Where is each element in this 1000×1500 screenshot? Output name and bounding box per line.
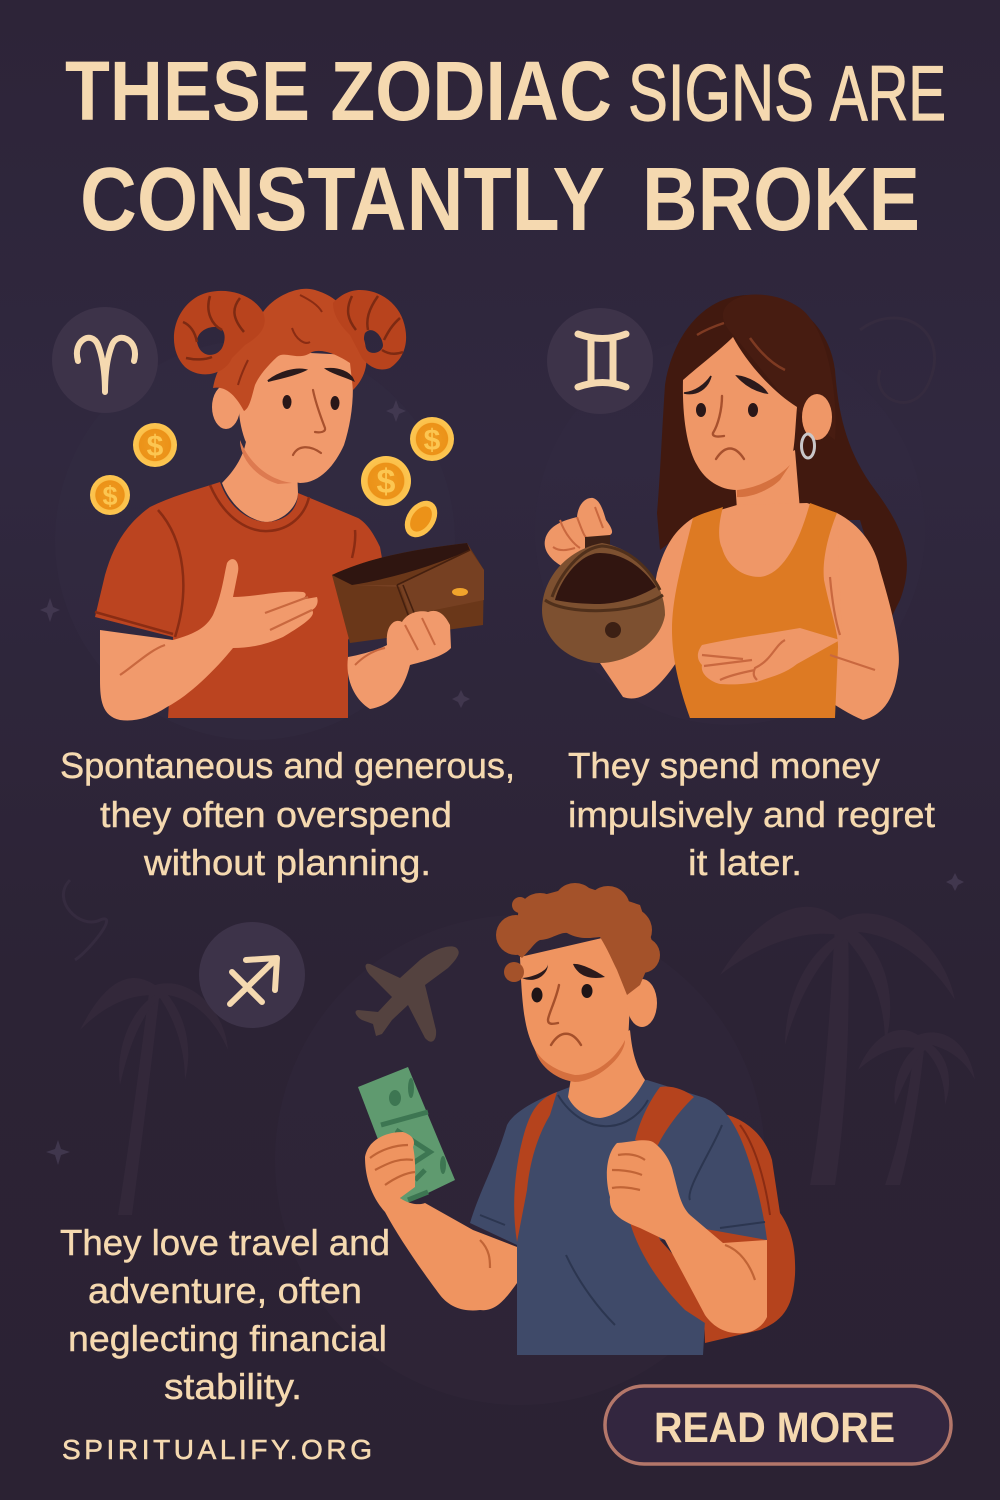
text: gemini description: impulsively and regret: [568, 794, 935, 835]
ear: [627, 979, 657, 1027]
icon: falling coins: $: [424, 424, 441, 457]
face: [239, 352, 353, 483]
long hair: [657, 295, 907, 620]
curly hair: [496, 883, 660, 995]
eyes, brows, nose and mouth: [522, 964, 605, 1045]
text: sagittarius description: adventure, often: [88, 1270, 362, 1311]
text: gemini description: They spend money: [568, 745, 880, 786]
wallet: [332, 543, 484, 643]
icon: aries sign: [52, 307, 158, 413]
coin pouch: [542, 535, 665, 663]
panel: sagittarius: [199, 883, 795, 1355]
text: sagittarius description: [60, 1222, 390, 1407]
text: sagittarius description: neglecting financial: [68, 1318, 387, 1359]
icon: falling coins: $: [147, 430, 164, 463]
icon: falling coins: [90, 417, 454, 543]
text: gemini description: [568, 745, 935, 883]
backpack: [700, 1113, 795, 1343]
t-shirt: [95, 482, 385, 718]
face: [683, 337, 797, 490]
icon: airplane: [355, 946, 459, 1042]
horns: [174, 290, 406, 374]
wallet hand: [347, 611, 451, 709]
text: aries description: Spontaneous and generous,: [60, 745, 515, 786]
eyes, brows, nose and mouth: [684, 376, 767, 459]
character: traveller with backpack: [358, 883, 795, 1355]
neck: [222, 435, 298, 522]
hair: [213, 289, 367, 411]
title line 2: BROKE: [642, 150, 920, 250]
panel: aries: [52, 289, 484, 720]
title: [65, 44, 946, 250]
open hand arm: [100, 559, 318, 720]
icon: falling coins: $: [102, 481, 118, 511]
t-shirt: [470, 1080, 767, 1355]
banknote: [358, 1067, 455, 1205]
hand holding pouch: [545, 498, 612, 568]
text: aries description: they often overspend: [100, 794, 452, 835]
eyes, brows, nose and mouth: [268, 369, 353, 455]
neck: [735, 450, 800, 510]
text: sagittarius description: They love travel and: [60, 1222, 390, 1263]
character: man with horned hair: [95, 289, 484, 720]
text: aries description: [60, 745, 515, 883]
neck: [568, 1030, 645, 1118]
icon: gemini sign: [547, 308, 653, 414]
icon: sagittarius sign: [199, 922, 305, 1028]
read more button: READ MORE: [654, 1404, 895, 1452]
title line 2: CONSTANTLY: [80, 150, 605, 250]
orange tank top: [672, 503, 838, 718]
open palm: [698, 628, 840, 684]
text: sagittarius description: stability.: [164, 1366, 302, 1407]
icon: falling coins: $: [377, 463, 396, 501]
title line 1: SIGNS: [628, 48, 814, 137]
panel: gemini: [542, 295, 907, 720]
ear and earring: [802, 394, 832, 458]
face: [520, 935, 630, 1075]
ear: [212, 385, 240, 429]
body and arms: [600, 503, 867, 718]
hand and arm with banknote: [365, 1132, 517, 1310]
character: woman with long hair: [542, 295, 907, 720]
title line 1: ARE: [830, 49, 946, 137]
title line 1: THESE ZODIAC: [65, 44, 612, 138]
text: aries description: without planning.: [143, 842, 431, 883]
brand name: SPIRITUALIFY.ORG: [62, 1434, 372, 1465]
straps: [514, 1087, 714, 1325]
hand on strap and arm: [607, 1140, 767, 1333]
text: gemini description: it later.: [688, 842, 802, 883]
read more button: [605, 1386, 951, 1464]
